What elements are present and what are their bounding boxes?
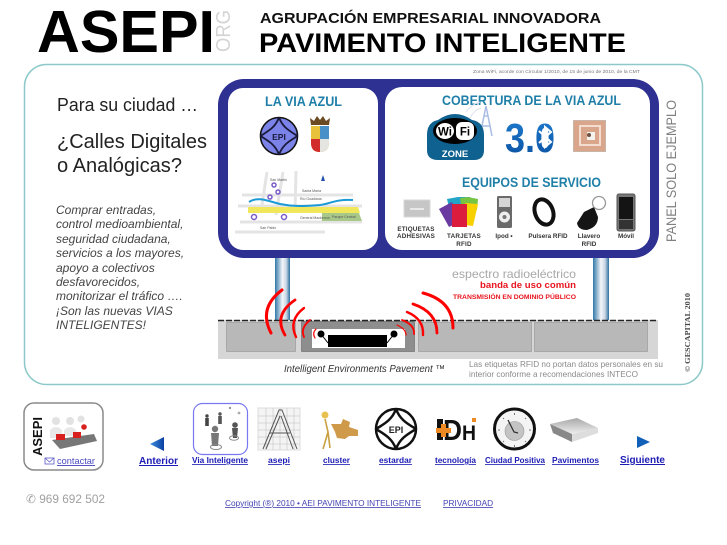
nav: via inteligente: Via Inteligente	[192, 456, 249, 465]
nav: pavimentos: Pavimentos	[552, 456, 600, 465]
icon: wifi tower	[466, 102, 492, 136]
intro body text: monitorizar el tráfico ….	[56, 289, 183, 303]
intro headings: o Analógicas?	[57, 155, 182, 177]
item: etiquetas adhesivas	[397, 200, 435, 240]
rfid privacy note	[469, 359, 663, 379]
intro body text: Comprar entradas,	[56, 203, 156, 217]
spectrum text	[452, 267, 576, 301]
pavement caption: Intelligent Environments Pavement ™	[284, 364, 445, 375]
billboard posts	[275, 256, 609, 321]
intro headings: Para su ciudad …	[57, 95, 198, 115]
item: tarjetas rfid: RFID	[456, 241, 472, 248]
footer privacy: PRIVACIDAD	[443, 498, 493, 508]
sensor chip	[318, 330, 398, 347]
icon: wifi zone	[427, 114, 484, 160]
wifi regulation note: Zona WiFi, acorde con Circular 1/2010, de 15 de junio de 2010, de la CMT	[473, 69, 640, 74]
map: San Pablo	[260, 226, 276, 230]
icon: wifi zone: ZONE	[442, 149, 468, 160]
icon: EPI badge: EPI	[272, 132, 286, 142]
side label: panel solo ejemplo: PANEL SOLO EJEMPLO	[663, 100, 679, 242]
item: movil: Móvil	[618, 233, 634, 240]
item: tarjetas rfid	[439, 197, 481, 248]
intro headings	[57, 95, 207, 177]
link: siguiente	[620, 436, 665, 466]
heading: cobertura: COBERTURA DE LA VIA AZUL	[442, 92, 621, 108]
spectrum text: espectro radioeléctrico	[452, 267, 576, 281]
nav: estardar: EPI	[389, 425, 403, 435]
intro body text: control medioambiental,	[56, 217, 183, 231]
spectrum text: banda de uso común	[480, 280, 576, 291]
item: ipod	[495, 196, 513, 240]
heading: equipos: EQUIPOS DE SERVICIO	[462, 174, 601, 190]
icon: bluetooth 3.0: 3.0	[505, 115, 555, 161]
panel: cobertura	[385, 87, 650, 250]
header titles	[259, 9, 626, 58]
icon: wifi zone: Wi	[438, 126, 452, 138]
logo: ASEPI.ORG: ASEPI	[37, 0, 215, 65]
item: ipod: Ipod •	[495, 233, 513, 240]
intro body text: desfavorecidos,	[56, 275, 140, 289]
nav: tecnologia: D	[443, 415, 462, 447]
icon: coat of arms	[310, 116, 330, 152]
icon: wifi zone: Fi	[460, 126, 470, 138]
item: pulsera rfid: Pulsera RFID	[528, 233, 568, 240]
intro body text: ¡Son las nuevas VIAS	[56, 304, 173, 318]
panel: la via azul	[228, 88, 378, 250]
map: Santa María	[302, 189, 321, 193]
intro body text: seguridad ciudadana,	[56, 232, 171, 246]
signal waves	[266, 290, 453, 338]
nav: estardar	[376, 409, 416, 465]
nav: pavimentos	[550, 418, 600, 465]
map: General Mackenna	[300, 216, 330, 220]
header titles: PAVIMENTO INTELIGENTE	[259, 28, 626, 58]
icon: people at table	[50, 416, 97, 449]
contact card	[24, 403, 103, 470]
map: Río Guadiana	[300, 197, 322, 201]
main panel	[24, 64, 702, 384]
link: anterior	[139, 437, 178, 467]
nav: tecnologia	[435, 415, 477, 465]
nav: ciudad positiva: Ciudad Positiva	[485, 456, 546, 465]
item: movil	[617, 194, 635, 240]
intro body text	[56, 203, 184, 332]
nav: via inteligente	[192, 404, 249, 465]
rfid privacy note: interior conforme a recomendaciones INTECO	[469, 369, 638, 379]
nav: tecnologia: tecnología	[435, 456, 477, 465]
rfid privacy note: Las etiquetas RFID no portan datos personales en su	[469, 359, 663, 369]
footer copyright: Copyright (®) 2010 • AEI PAVIMENTO INTELIGENTE	[225, 498, 421, 508]
item: pulsera rfid	[528, 197, 568, 240]
icon: rfid tag	[574, 120, 606, 152]
item: etiquetas adhesivas: ETIQUETAS	[397, 226, 435, 233]
icon: EPI badge	[260, 118, 298, 154]
pavement cross-section	[218, 290, 658, 359]
link: anterior: Anterior	[139, 456, 178, 467]
nav: tecnologia: H	[462, 422, 476, 445]
card label: ASEPI	[30, 417, 45, 456]
intro headings: ¿Calles Digitales	[57, 131, 207, 153]
nav: estardar: estardar	[379, 456, 412, 465]
billboard	[218, 79, 659, 258]
map: Parque Central	[332, 215, 356, 219]
spectrum text: TRANSMISIÓN EN DOMINIO PÚBLICO	[453, 292, 576, 301]
map: San Martín	[270, 178, 287, 182]
header titles: AGRUPACIÓN EMPRESARIAL INNOVADORA	[260, 9, 601, 27]
intro body text: servicios a los mayores,	[56, 246, 184, 260]
nav: asepi	[258, 408, 300, 465]
heading: la via azul: LA VIA AZUL	[265, 93, 342, 109]
item: etiquetas adhesivas: ADHESIVAS	[397, 233, 435, 240]
link: contactar: contactar	[57, 456, 95, 467]
nav: cluster	[322, 412, 358, 465]
map	[235, 171, 362, 232]
logo: ASEPI.ORG: ORG	[213, 10, 235, 52]
intro body text: INTELIGENTES!	[56, 318, 147, 332]
item: tarjetas rfid: TARJETAS	[447, 233, 481, 240]
copyright vertical: © GESCAPITAL 2010	[683, 293, 692, 372]
intro body text: apoyo a colectivos	[56, 261, 155, 275]
nav: ciudad positiva	[485, 409, 546, 465]
item: llavero rfid: RFID	[582, 241, 597, 248]
phone: ✆ 969 692 502	[26, 492, 105, 506]
item: llavero rfid: Llavero	[578, 233, 600, 240]
item: llavero rfid	[577, 196, 606, 248]
nav: cluster: cluster	[323, 456, 350, 465]
nav: asepi: asepi	[268, 456, 290, 465]
link: siguiente: Siguiente	[620, 455, 665, 466]
